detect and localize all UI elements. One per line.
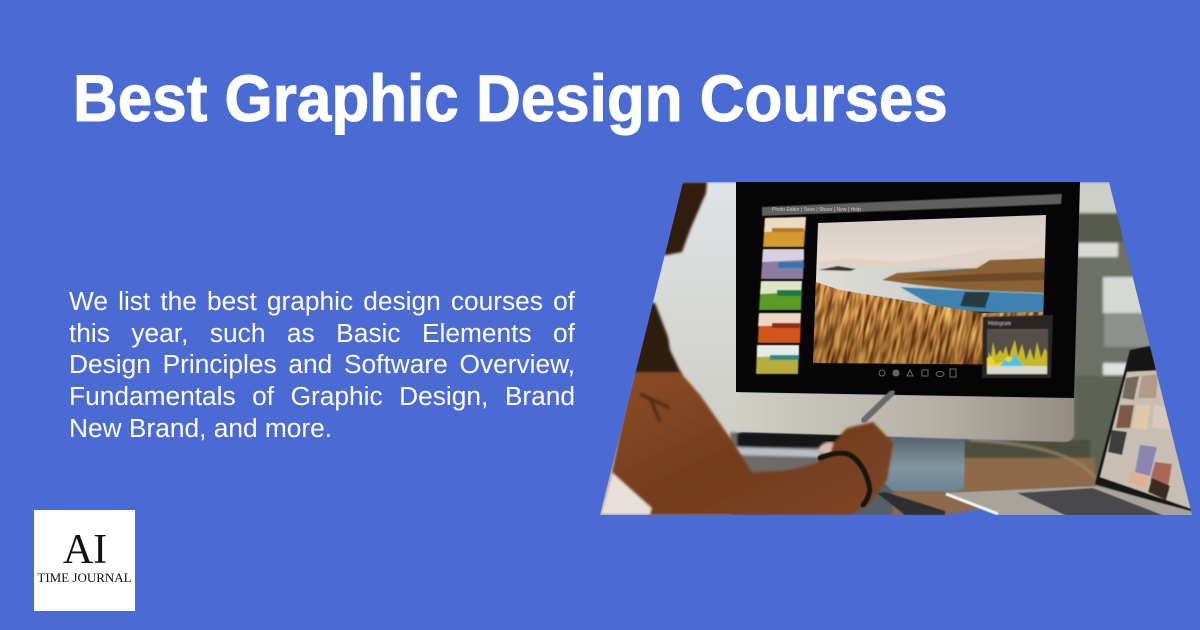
editor menu bar — [762, 194, 1062, 216]
laptop keyboard — [1017, 488, 1165, 516]
logo: AI Time Journal — [34, 510, 135, 611]
main landscape image — [813, 215, 1046, 364]
monitor stand — [880, 436, 965, 492]
intro text block: this year, such as Basic Elements of — [69, 318, 575, 348]
intro text block: New Brand, and more. — [69, 413, 332, 443]
histogram panel: Histogram — [988, 321, 1011, 327]
monitor screen bezel — [736, 182, 1080, 398]
neck shadow — [634, 301, 684, 378]
white sleeve — [600, 472, 652, 515]
laptop screen — [1095, 346, 1200, 516]
stylus pen — [863, 392, 893, 421]
arm and hand — [600, 372, 893, 515]
thumbnail four — [758, 313, 801, 343]
intro text block — [69, 286, 576, 443]
intro text block: Fundamentals of Graphic Design, Brand — [69, 381, 575, 411]
thumbnail one — [763, 217, 806, 247]
golden grass — [813, 282, 1044, 364]
monitor — [736, 182, 1103, 492]
photo: designer at monitor in trapezoid crop — [600, 182, 1192, 515]
thumb highlight — [818, 442, 834, 456]
intro text block: We list the best graphic design courses of — [69, 286, 575, 316]
editor toolbar icons — [879, 369, 956, 377]
monitor chin — [736, 392, 1074, 442]
person — [600, 182, 893, 515]
tablet strip on desk — [877, 492, 945, 515]
logo: AI Time Journal: AI — [63, 527, 107, 573]
bead bracelet — [820, 453, 870, 505]
thumbnail strip — [756, 217, 806, 374]
thumbnail three — [759, 281, 802, 310]
thumbnail two — [761, 249, 804, 279]
editor menu bar: Photo Editor | Save | Share | New | Help — [772, 207, 861, 213]
logo: AI Time Journal: TIME JOURNAL — [37, 570, 132, 585]
head and hair — [664, 182, 709, 257]
title: Best Graphic Design Courses — [73, 61, 948, 135]
tattoo — [640, 394, 670, 422]
laptop — [945, 346, 1200, 516]
histogram panel — [982, 315, 1053, 378]
intro text block: Design Principles and Software Overview, — [69, 349, 575, 379]
laptop photo tiles — [1108, 374, 1176, 500]
thumbnail five — [756, 345, 799, 374]
wall and background — [600, 182, 1200, 515]
laptop base — [945, 486, 1194, 516]
